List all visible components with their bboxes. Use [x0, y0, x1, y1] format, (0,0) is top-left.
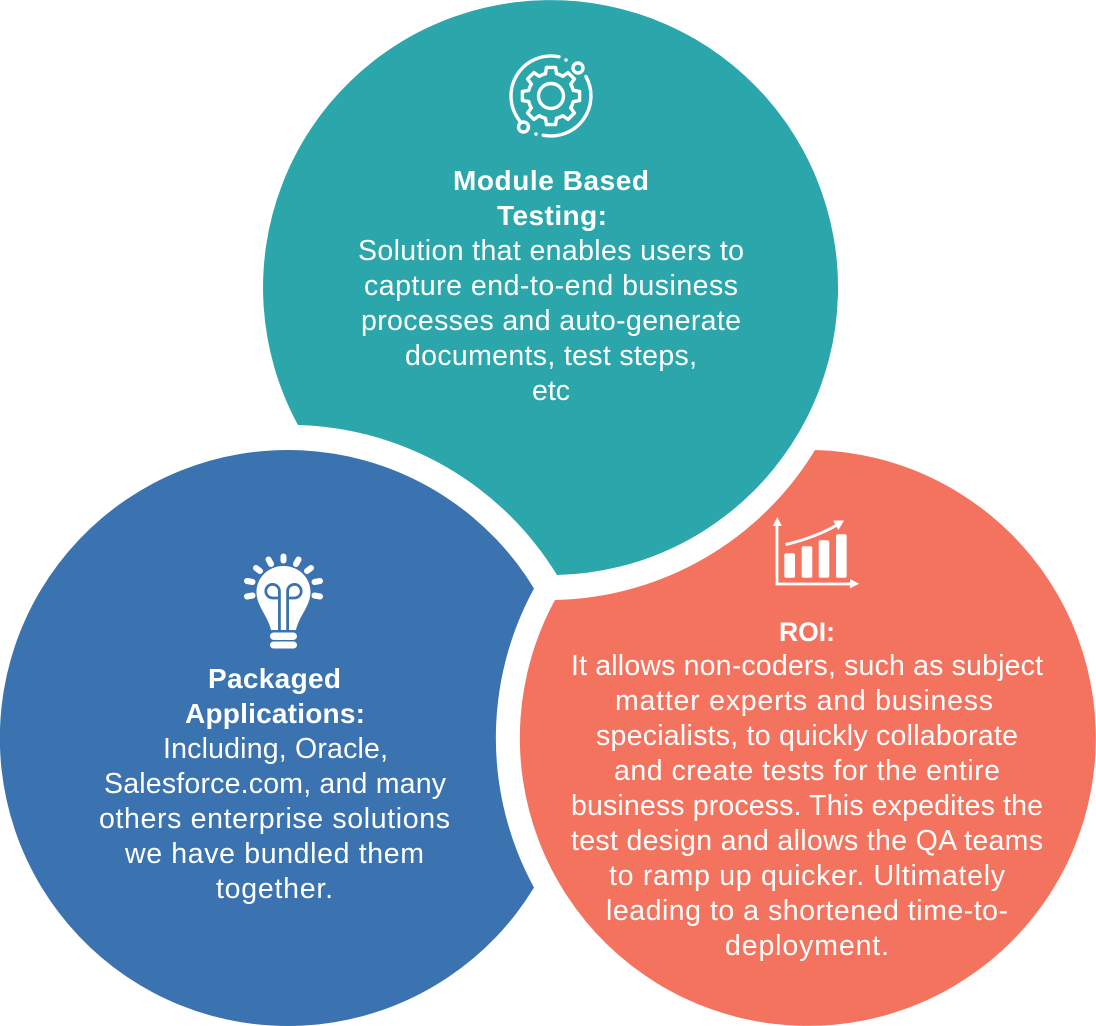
icon: gear with orbit	[511, 56, 591, 136]
text: packaged applications description: we have bundled them	[124, 838, 424, 870]
text: module based testing description: etc	[532, 375, 570, 407]
heading: roi: ROI:	[779, 617, 835, 647]
text: roi description: deployment.	[725, 930, 889, 962]
heading: module based testing	[453, 165, 649, 231]
text: roi description: It allows non-coders, such as subject	[571, 650, 1043, 682]
text: packaged applications description: Salesforce.com, and many	[104, 768, 447, 800]
text: packaged applications description: others enterprise solutions	[99, 803, 450, 835]
text: roi description: test design and allows the QA teams	[571, 825, 1043, 857]
heading: module based testing: Module Based	[453, 165, 649, 196]
heading: module based testing: Testing:	[497, 200, 607, 231]
text: module based testing description	[358, 235, 744, 407]
text: roi description: and create tests for the entire	[614, 755, 1000, 787]
text: packaged applications description: together.	[216, 873, 333, 905]
text: module based testing description: documents, test steps,	[405, 340, 697, 372]
text: module based testing description: processes and auto-generate	[361, 305, 741, 337]
text: module based testing description: capture end-to-end business	[364, 270, 738, 302]
bulb base	[270, 632, 297, 640]
heading: packaged applications	[185, 663, 365, 729]
chart trend arrow	[786, 525, 837, 544]
text: packaged applications description	[99, 733, 450, 905]
panel: packaged applications	[0, 450, 534, 1026]
icon: light bulb	[247, 556, 320, 648]
heading: packaged applications: Packaged	[208, 663, 341, 694]
panel: module based testing	[263, 0, 838, 575]
text: roi description: specialists, to quickly collaborate	[596, 720, 1018, 752]
text: roi description: business process. This expedites the	[571, 790, 1043, 822]
text: roi description	[571, 650, 1043, 962]
chart axes	[777, 524, 852, 584]
blue circle	[0, 450, 534, 1026]
text: roi description: matter experts and business	[615, 685, 993, 717]
text: roi description: to ramp up quicker. Ultimately	[609, 860, 1006, 892]
bulb filament	[266, 584, 301, 630]
coral circle	[520, 450, 1096, 1026]
heading: packaged applications: Applications:	[185, 698, 365, 729]
text: module based testing description: Solution that enables users to	[358, 235, 744, 267]
chart bars	[784, 534, 847, 578]
icon: growth chart	[773, 517, 859, 588]
panel: roi	[520, 450, 1096, 1026]
bulb rays	[247, 556, 320, 596]
text: roi description: leading to a shortened time-to-	[606, 895, 1008, 927]
bulb glass	[256, 566, 310, 630]
text: packaged applications description: Including, Oracle,	[163, 733, 388, 765]
teal circle	[263, 0, 838, 575]
